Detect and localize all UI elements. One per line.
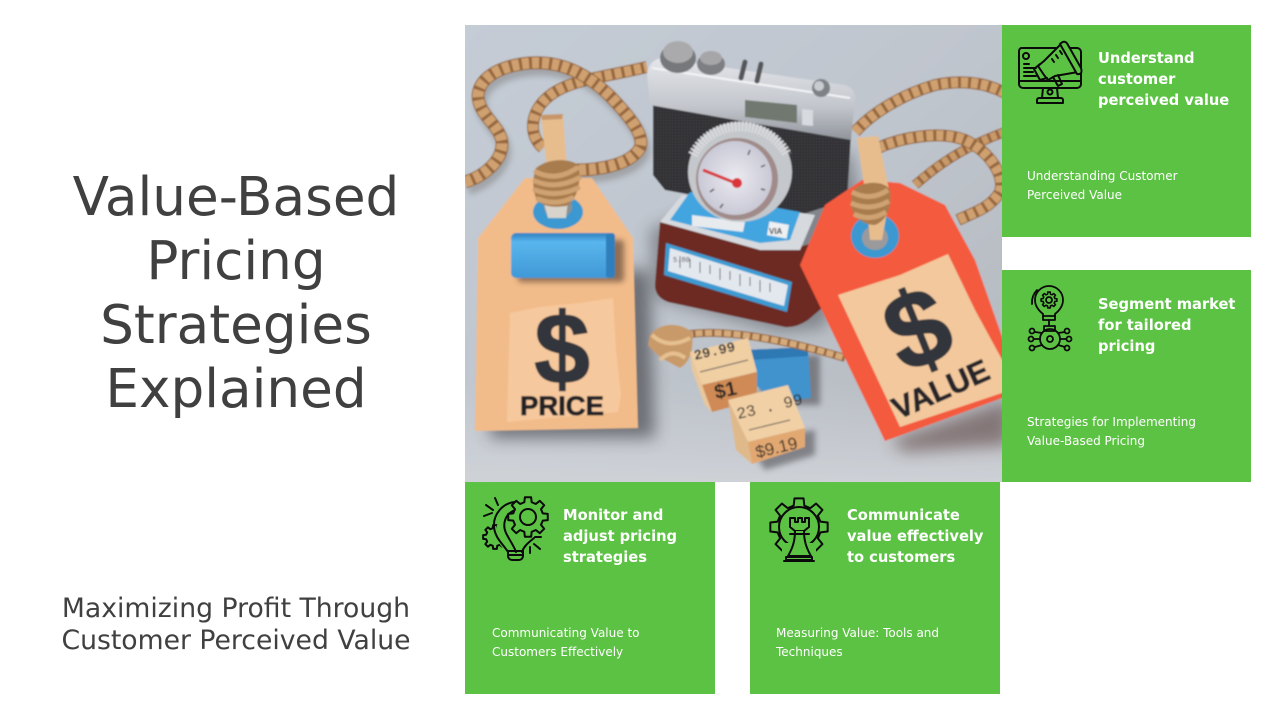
icon: monitor with megaphone	[1018, 40, 1082, 104]
heading: for tailored	[1098, 317, 1191, 334]
viewfinder window	[745, 100, 797, 123]
title	[73, 166, 399, 420]
blue roller on price tag	[511, 233, 624, 282]
price cube 23.99: 23 . 99	[735, 391, 805, 424]
price tag shadow	[490, 270, 655, 438]
description: Strategies for Implementing	[1027, 415, 1196, 429]
description: Customers Effectively	[492, 645, 623, 659]
heading: Monitor and	[563, 507, 663, 524]
title: Strategies	[100, 294, 372, 356]
knot right	[851, 183, 890, 225]
price paper: $	[534, 293, 590, 405]
camera	[647, 41, 860, 332]
camera: VIA	[769, 227, 783, 236]
title: Explained	[105, 358, 367, 420]
description: Perceived Value	[1027, 188, 1122, 202]
heading: Understand	[1098, 50, 1195, 67]
price cube 29.99: 29.99	[693, 340, 737, 365]
heading: Communicate	[847, 507, 960, 524]
heading: Segment market	[1098, 296, 1235, 313]
description: Techniques	[776, 645, 843, 659]
top knobs	[660, 43, 696, 73]
scale strip	[664, 243, 792, 312]
price paper: PRICE	[520, 391, 604, 421]
heading: customer	[1098, 71, 1175, 88]
blue cylinder behind cubes	[746, 347, 820, 405]
heading	[1098, 296, 1236, 355]
description	[776, 626, 939, 659]
heading: value effectively	[847, 528, 984, 545]
silver top plate	[647, 58, 855, 140]
value tag eyelet	[851, 214, 899, 258]
description: Understanding Customer	[1027, 169, 1178, 183]
gauge	[688, 122, 792, 222]
description: Measuring Value: Tools and	[776, 626, 939, 640]
card: communicate value	[750, 482, 1000, 694]
title: Pricing	[146, 230, 326, 292]
illustration: price and value tags with camera	[465, 25, 1002, 482]
photo background	[460, 20, 1010, 490]
camera shadow	[650, 150, 860, 332]
camera leather body	[653, 100, 851, 215]
value tag	[800, 180, 1005, 441]
value tag shadow	[890, 400, 1010, 452]
subtitle: Customer Perceived Value	[61, 625, 411, 656]
heading	[1098, 50, 1229, 109]
subtitle: Maximizing Profit Through	[62, 593, 410, 624]
left ropes	[465, 63, 647, 189]
price paper	[507, 293, 621, 422]
value paper	[838, 254, 1005, 427]
description	[1027, 415, 1196, 448]
rope between cubes	[648, 325, 845, 368]
icon: bulb with network	[1028, 285, 1072, 352]
icon: chess rook in gear	[769, 497, 829, 562]
description	[1027, 169, 1178, 202]
heading: to customers	[847, 549, 955, 566]
description: Communicating Value to	[492, 626, 640, 640]
card: monitor and adjust	[465, 482, 715, 694]
heading: strategies	[563, 549, 647, 566]
heading	[563, 507, 677, 566]
clothespin left	[541, 114, 568, 218]
heading: adjust pricing	[563, 528, 677, 545]
card: understand customer perceived value	[1002, 25, 1251, 237]
price tag	[475, 178, 638, 431]
value paper: VALUE	[887, 353, 995, 426]
price cube 23.99	[728, 385, 815, 470]
card: segment market	[1002, 270, 1251, 482]
camera: 5.80	[673, 257, 690, 265]
price cube 29.99	[690, 338, 757, 412]
base	[655, 222, 822, 327]
title: Value-Based	[73, 166, 399, 228]
icon: bulb with gears	[482, 496, 549, 561]
description: Value-Based Pricing	[1027, 434, 1145, 448]
heading: pricing	[1098, 338, 1155, 355]
clothespin right	[857, 136, 890, 240]
price cube 29.99: $1	[712, 378, 739, 404]
right ropes	[855, 82, 1005, 220]
value paper: $	[867, 261, 968, 396]
price cube 23.99: $9.19	[754, 434, 799, 462]
description	[492, 626, 640, 659]
price tag eyelet	[533, 195, 583, 229]
knot left	[533, 160, 580, 207]
subtitle	[61, 593, 411, 656]
heading: perceived value	[1098, 92, 1229, 109]
heading	[847, 507, 984, 566]
